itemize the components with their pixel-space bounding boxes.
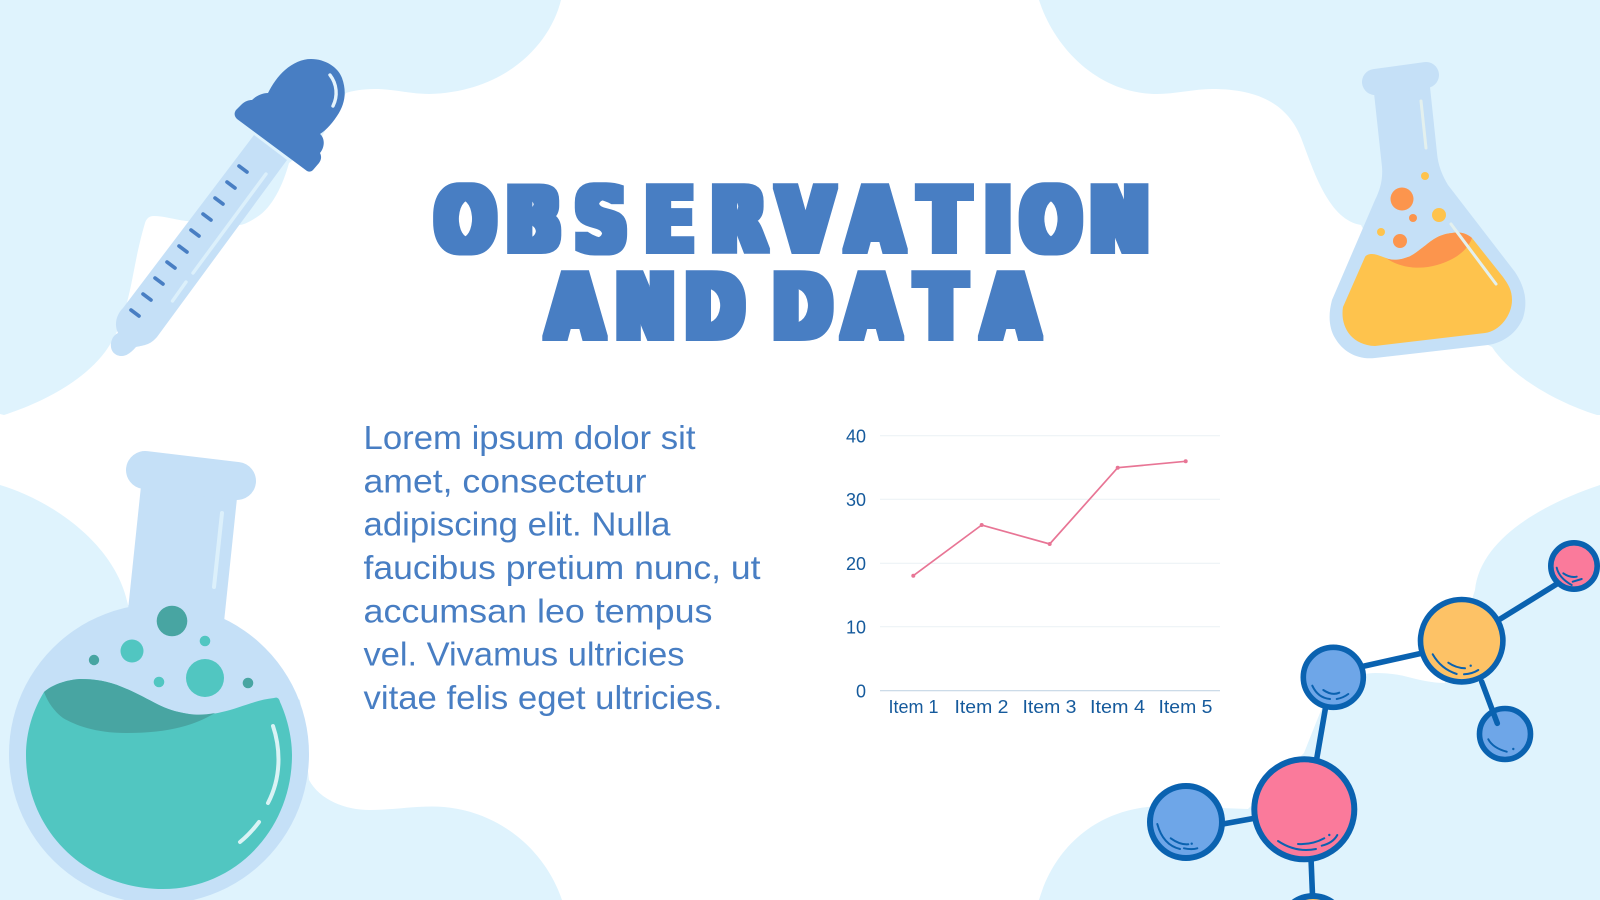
- body text: [364, 420, 761, 717]
- molecule bonds: [1220, 582, 1560, 895]
- large pink atom: [1254, 759, 1354, 859]
- dropper bulb: [235, 59, 345, 172]
- teal liquid: [26, 679, 292, 889]
- yellow liquid: [1342, 233, 1512, 346]
- body text: adipiscing elit. Nulla: [364, 507, 671, 544]
- flask body: [9, 604, 309, 900]
- conical flask bubbles: [1377, 172, 1446, 248]
- background blob: top left: [0, 0, 561, 415]
- icon: round flask: [9, 470, 309, 900]
- body text: amet, consectetur: [364, 463, 646, 500]
- title line 2: AND DATA: [548, 256, 1038, 361]
- y axis labels: 0: [856, 682, 866, 702]
- icon: dropper: [111, 59, 345, 356]
- body text: vel. Vivamus ultricies: [364, 637, 684, 674]
- x axis labels: Item 5: [1158, 697, 1212, 717]
- y axis labels: 10: [846, 618, 866, 638]
- data points: [911, 459, 1188, 578]
- body text: faucibus pretium nunc, ut: [364, 550, 761, 587]
- dropper measurement ticks: [131, 166, 247, 316]
- bubbles: [89, 606, 253, 697]
- conical flask highlights: [1421, 101, 1496, 284]
- x axis labels: Item 3: [1022, 697, 1076, 717]
- body text: vitae felis eget ultricies.: [364, 680, 722, 717]
- flask lip: [145, 470, 237, 481]
- blue atom left: [1150, 786, 1222, 858]
- background blob: bottom left: [0, 485, 562, 900]
- x axis labels: Item 4: [1090, 697, 1145, 717]
- flask neck: [128, 486, 237, 622]
- bond over right blue atom: [1482, 682, 1497, 723]
- body text: accumsan leo tempus: [364, 593, 712, 630]
- title line 1: OBSERVATION: [436, 169, 1149, 274]
- small pink atom: [1551, 543, 1597, 589]
- yellow atom: [1420, 600, 1503, 682]
- y axis labels: 40: [846, 426, 866, 446]
- conical flask lip: [1375, 75, 1426, 82]
- x axis labels: Item 1: [888, 697, 938, 717]
- conical flask body: [1330, 87, 1525, 358]
- chart x axis: [880, 690, 1220, 692]
- flask highlights: [214, 513, 278, 842]
- line chart: [846, 426, 1220, 717]
- orange liquid surface: [1386, 233, 1472, 268]
- blue atom upper: [1303, 647, 1363, 707]
- data line: [913, 461, 1186, 576]
- dropper tube: [111, 135, 287, 356]
- blue atom right: [1480, 708, 1530, 760]
- icon: molecule: [1150, 543, 1597, 900]
- y axis labels: [846, 426, 866, 702]
- background blob: bottom right: [1039, 485, 1600, 900]
- y axis labels: 30: [846, 490, 866, 510]
- liquid back surface: [44, 679, 215, 733]
- x axis labels: Item 2: [954, 697, 1008, 717]
- atom shine marks: [1157, 568, 1582, 850]
- bulb highlight: [330, 75, 336, 106]
- x axis labels: [888, 697, 1212, 717]
- title: [436, 169, 1149, 361]
- icon: conical flask: [1330, 75, 1525, 358]
- bottom atom rim: [1292, 893, 1334, 900]
- background blob: top right: [1039, 0, 1600, 415]
- body text: Lorem ipsum dolor sit: [364, 420, 696, 457]
- chart gridlines: [880, 436, 1220, 627]
- bottom atom fill: [1305, 899, 1321, 900]
- atom shine dots: [1190, 664, 1515, 845]
- y axis labels: 20: [846, 554, 866, 574]
- dropper glass highlights: [172, 174, 266, 301]
